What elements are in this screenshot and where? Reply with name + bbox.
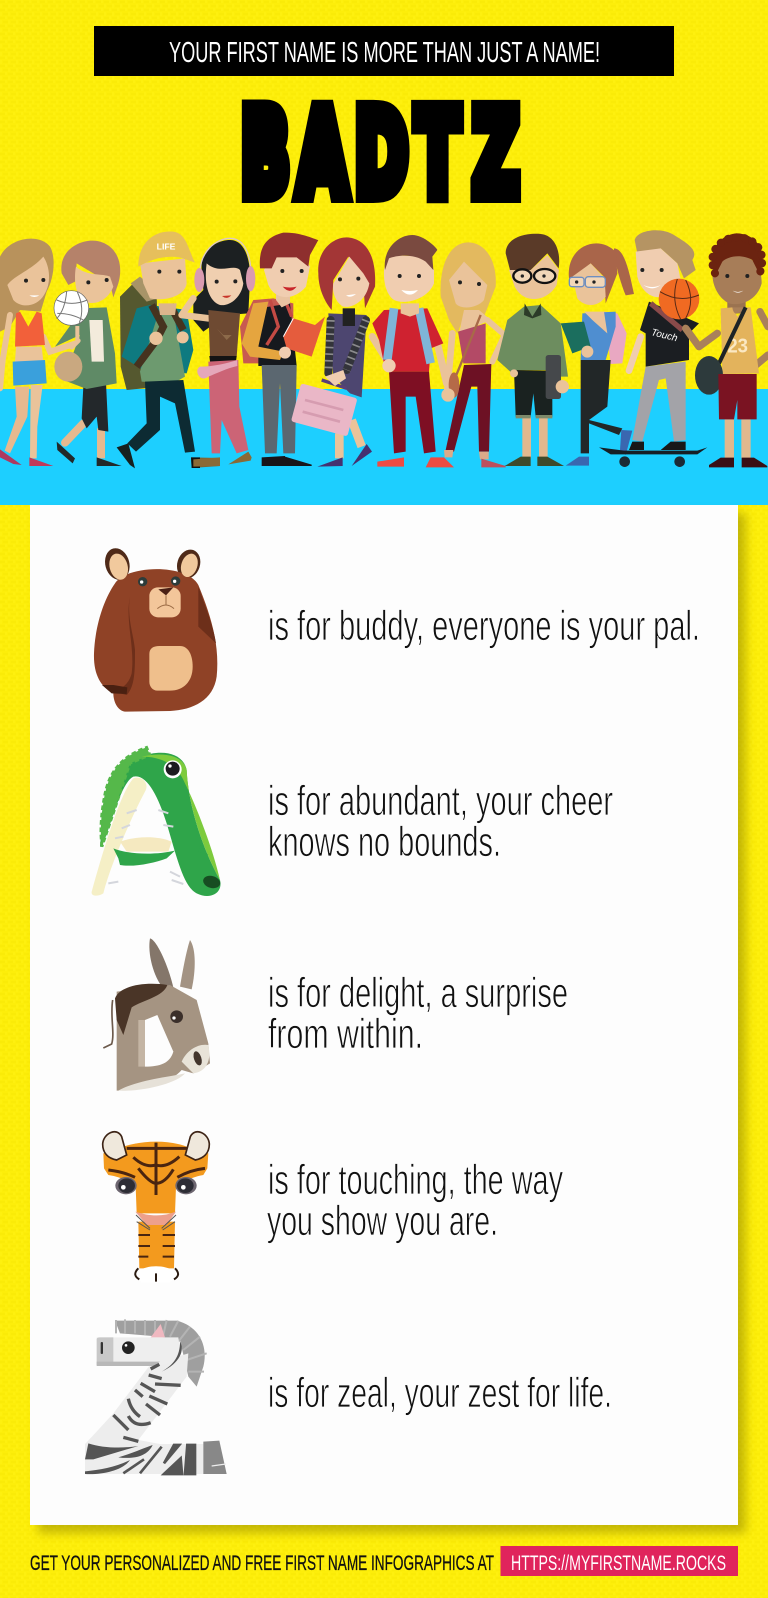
icon: donkey letter D [103, 938, 210, 1091]
text: T meaning: you show you are. [267, 1197, 498, 1244]
icon: crocodile letter A [92, 747, 222, 896]
footer call to action: GET YOUR PERSONALIZED AND FREE FIRST NAME INFOGRAPHICS AT [30, 1552, 494, 1575]
footer link button [500, 1546, 738, 1576]
person: skateboarder with basketball: Touch [650, 327, 679, 345]
header banner [94, 26, 674, 76]
person: girl with volleyball [54, 241, 122, 466]
person: blonde girl [441, 242, 506, 467]
icon: tiger letter T [103, 1132, 209, 1282]
text: D meaning: from within. [268, 1010, 423, 1057]
title: name: BADTZ [241, 87, 519, 223]
panel: letters and meanings [30, 505, 746, 1533]
person: girl with headphones [182, 238, 255, 467]
person: girl with ponytail and tablet [561, 243, 634, 466]
text: A meaning: is for abundant, your cheer [268, 777, 613, 824]
person: hiker with backpack and cap: LIFE [157, 241, 176, 251]
person: boy in red shirt [372, 235, 454, 467]
person: skateboarder with basketball [599, 230, 717, 467]
text: Z meaning: is for zeal, your zest for life. [268, 1369, 612, 1416]
blue floor band [0, 389, 768, 505]
icon: bear letter B [94, 545, 217, 712]
person: boy reading book [240, 233, 325, 466]
text: D meaning: is for delight, a surprise [268, 969, 568, 1016]
text: A meaning: knows no bounds. [268, 818, 501, 865]
icon: zebra letter Z [85, 1319, 227, 1474]
person: red-haired girl with pink bag [291, 237, 375, 467]
person: boy with glasses and laptop [497, 234, 569, 466]
illustration: crowd of people [0, 230, 768, 468]
person: girl in orange top [0, 239, 78, 466]
text: T meaning: is for touching, the way [268, 1156, 563, 1203]
person: hiker with backpack and cap [117, 231, 220, 468]
person: boy in yellow tank top [695, 233, 768, 467]
person: boy in yellow tank top: 23 [727, 335, 748, 358]
